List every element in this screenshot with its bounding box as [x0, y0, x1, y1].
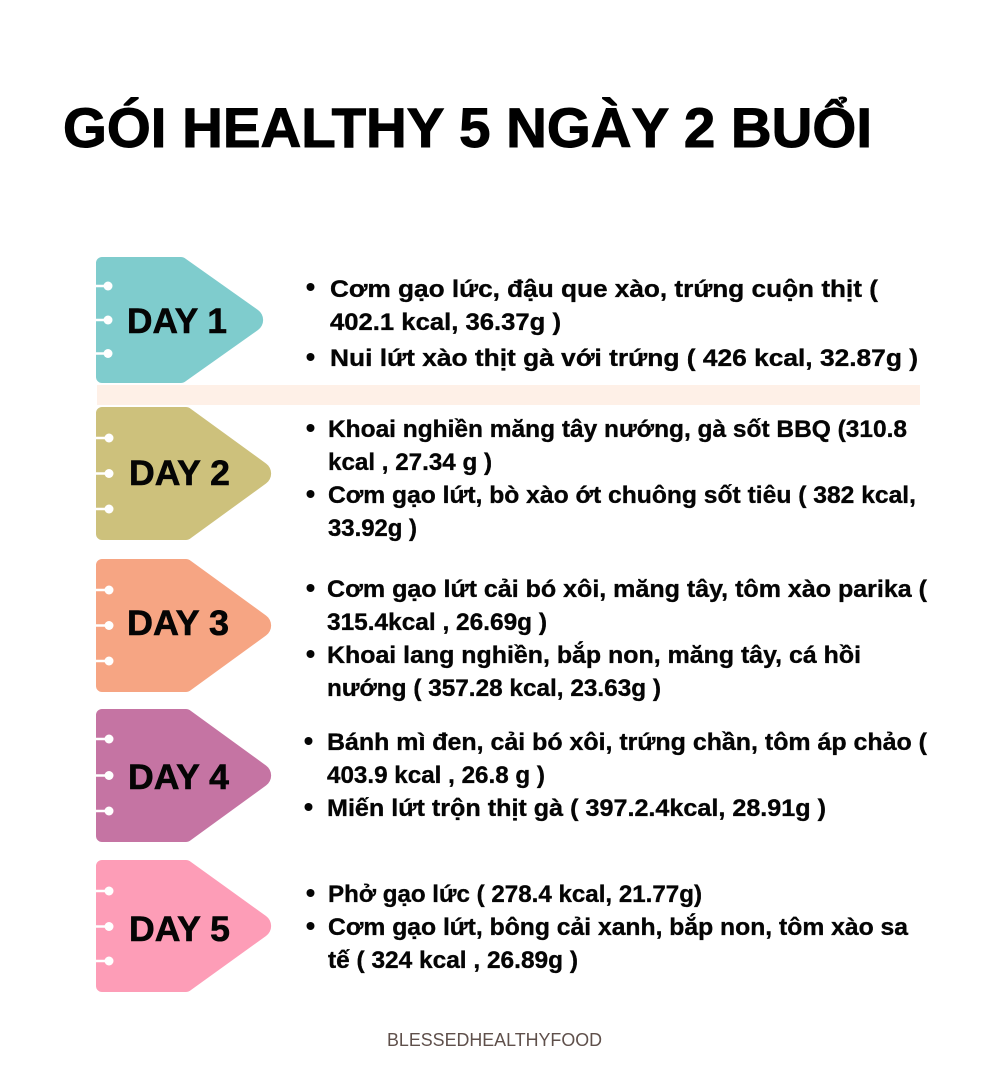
day 2 menu list: Khoai nghiền măng tây nướng, gà sốt BBQ (310.8 — [328, 416, 907, 443]
day 3 menu list — [306, 576, 928, 702]
footer brand: BLESSEDHEALTHYFOOD — [387, 1030, 602, 1050]
day 1 menu list: 402.1 kcal, 36.37g ) — [330, 309, 561, 336]
day 2 row — [96, 407, 916, 542]
day 2 menu list: Cơm gạo lứt, bò xào ớt chuông sốt tiêu ( 382 kcal, — [328, 482, 916, 509]
day 3 menu list: Cơm gạo lứt cải bó xôi, măng tây, tôm xào parika ( — [327, 576, 928, 603]
day 2 tag: DAY 2 — [129, 454, 230, 493]
day 3 menu list: 315.4kcal , 26.69g ) — [327, 609, 547, 636]
day 3 tag: DAY 3 — [127, 604, 229, 643]
day 1 menu list — [306, 276, 918, 372]
day 4 menu list: 403.9 kcal , 26.8 g ) — [327, 762, 545, 789]
day 3 menu list: nướng ( 357.28 kcal, 23.63g ) — [327, 675, 661, 702]
day 1 menu list: Nui lứt xào thịt gà với trứng ( 426 kcal, 32.87g ) — [330, 345, 918, 372]
day 4 menu list — [304, 729, 928, 822]
day 5 menu list: Phở gạo lức ( 278.4 kcal, 21.77g) — [328, 881, 702, 908]
day 1 tag: DAY 1 — [127, 302, 227, 341]
day 5 menu list: Cơm gạo lứt, bông cải xanh, bắp non, tôm xào sa — [328, 913, 908, 941]
day 2 tag — [96, 407, 271, 540]
day 4 menu list: Bánh mì đen, cải bó xôi, trứng chần, tôm áp chảo ( — [327, 729, 928, 756]
day 4 tag: DAY 4 — [128, 758, 230, 797]
divider band — [97, 385, 920, 405]
day 5 row — [96, 860, 908, 992]
title: GÓI HEALTHY 5 NGÀY 2 BUỔI — [63, 96, 872, 159]
day 5 menu list: tế ( 324 kcal , 26.89g ) — [328, 947, 578, 974]
day 5 tag — [96, 860, 271, 992]
day 1 menu list: Cơm gạo lức, đậu que xào, trứng cuộn thịt ( — [330, 276, 879, 303]
day 4 row — [96, 709, 928, 842]
day 3 row — [96, 559, 928, 702]
day 2 menu list: 33.92g ) — [328, 515, 417, 542]
day 2 menu list: kcal , 27.34 g ) — [328, 449, 492, 476]
day 5 menu list — [306, 881, 908, 974]
day 4 menu list: Miến lứt trộn thịt gà ( 397.2.4kcal, 28.91g ) — [327, 795, 826, 822]
day 3 menu list: Khoai lang nghiền, bắp non, măng tây, cá hồi — [327, 641, 861, 669]
day 1 row — [96, 257, 918, 383]
day 2 menu list — [306, 416, 916, 542]
day 3 tag — [96, 559, 271, 692]
day 1 tag — [96, 257, 263, 383]
day 5 tag: DAY 5 — [129, 910, 230, 949]
day 4 tag — [96, 709, 271, 842]
